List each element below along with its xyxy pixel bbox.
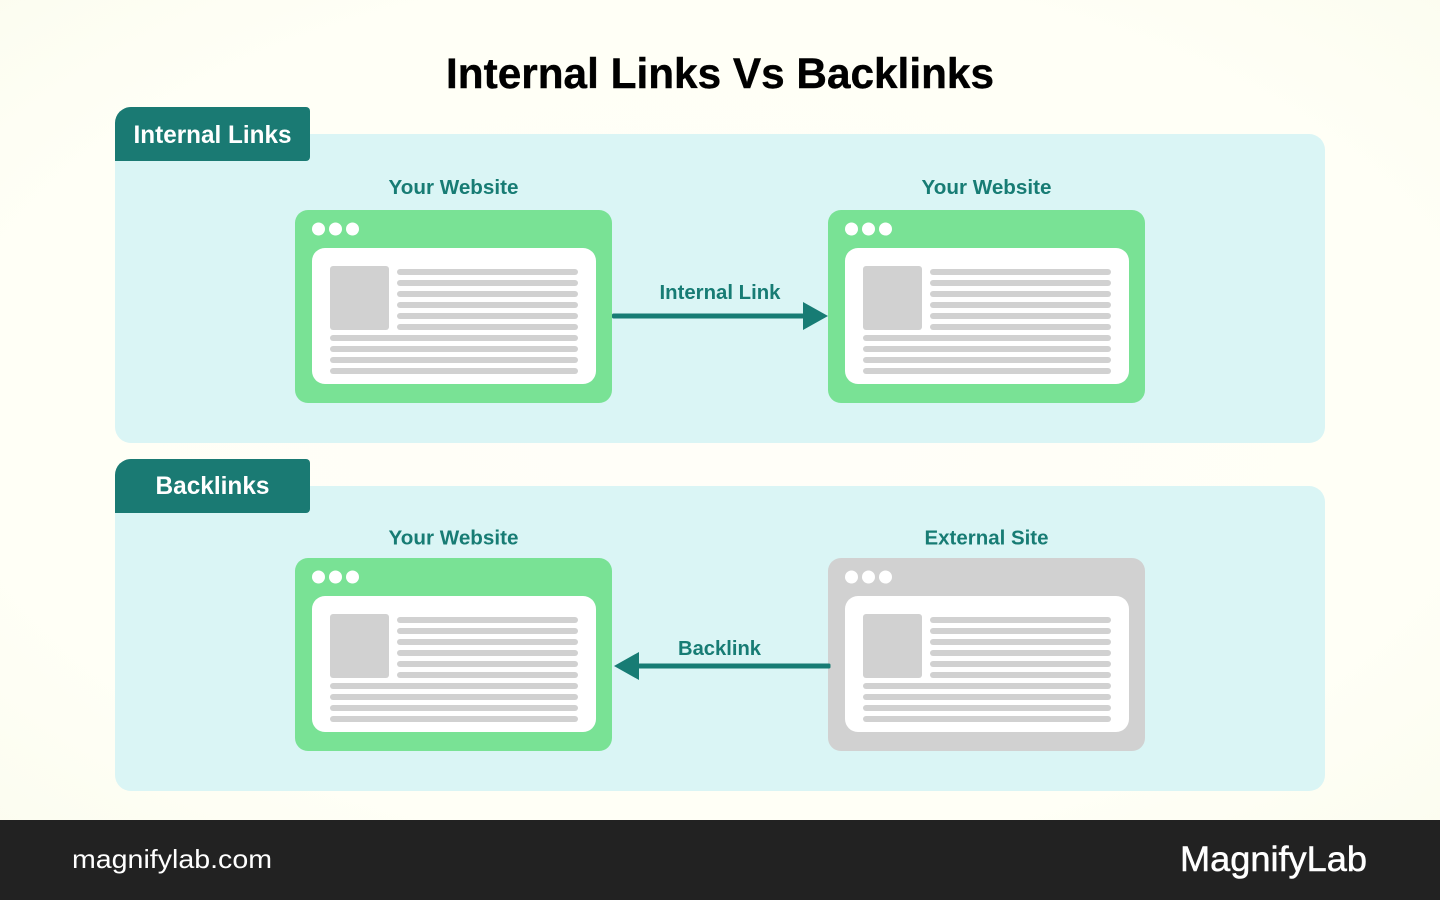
arrow: backlink: Backlink: [678, 637, 762, 660]
panel: backlinks: [115, 459, 1325, 791]
panel background: [115, 134, 1325, 443]
label: external site: External Site: [924, 526, 1048, 550]
panel background: [115, 486, 1325, 791]
footer url: magnifylab.com: [72, 844, 272, 874]
label: your website left: Your Website: [388, 176, 518, 199]
browser window: your website right: [828, 210, 1145, 403]
arrow: backlink: [614, 637, 830, 680]
footer bar: [0, 820, 1440, 900]
tab: internal links: [115, 107, 310, 161]
label: your website: Your Website: [388, 526, 518, 550]
tab: internal links: Internal Links: [134, 121, 292, 149]
footer: [0, 820, 1440, 900]
footer logo: MagnifyLab: [1180, 840, 1367, 879]
panel: internal links: [115, 107, 1325, 443]
arrow: internal link: [612, 281, 828, 330]
browser window: your website left: [295, 210, 612, 403]
browser window: external site: [828, 558, 1145, 751]
tab: backlinks: Backlinks: [156, 472, 270, 500]
title: Internal Links Vs Backlinks: [446, 50, 994, 98]
arrow: internal link: Internal Link: [660, 281, 781, 304]
tab: backlinks: [115, 459, 310, 513]
label: your website right: Your Website: [922, 176, 1052, 199]
browser window: your website: [295, 558, 612, 751]
